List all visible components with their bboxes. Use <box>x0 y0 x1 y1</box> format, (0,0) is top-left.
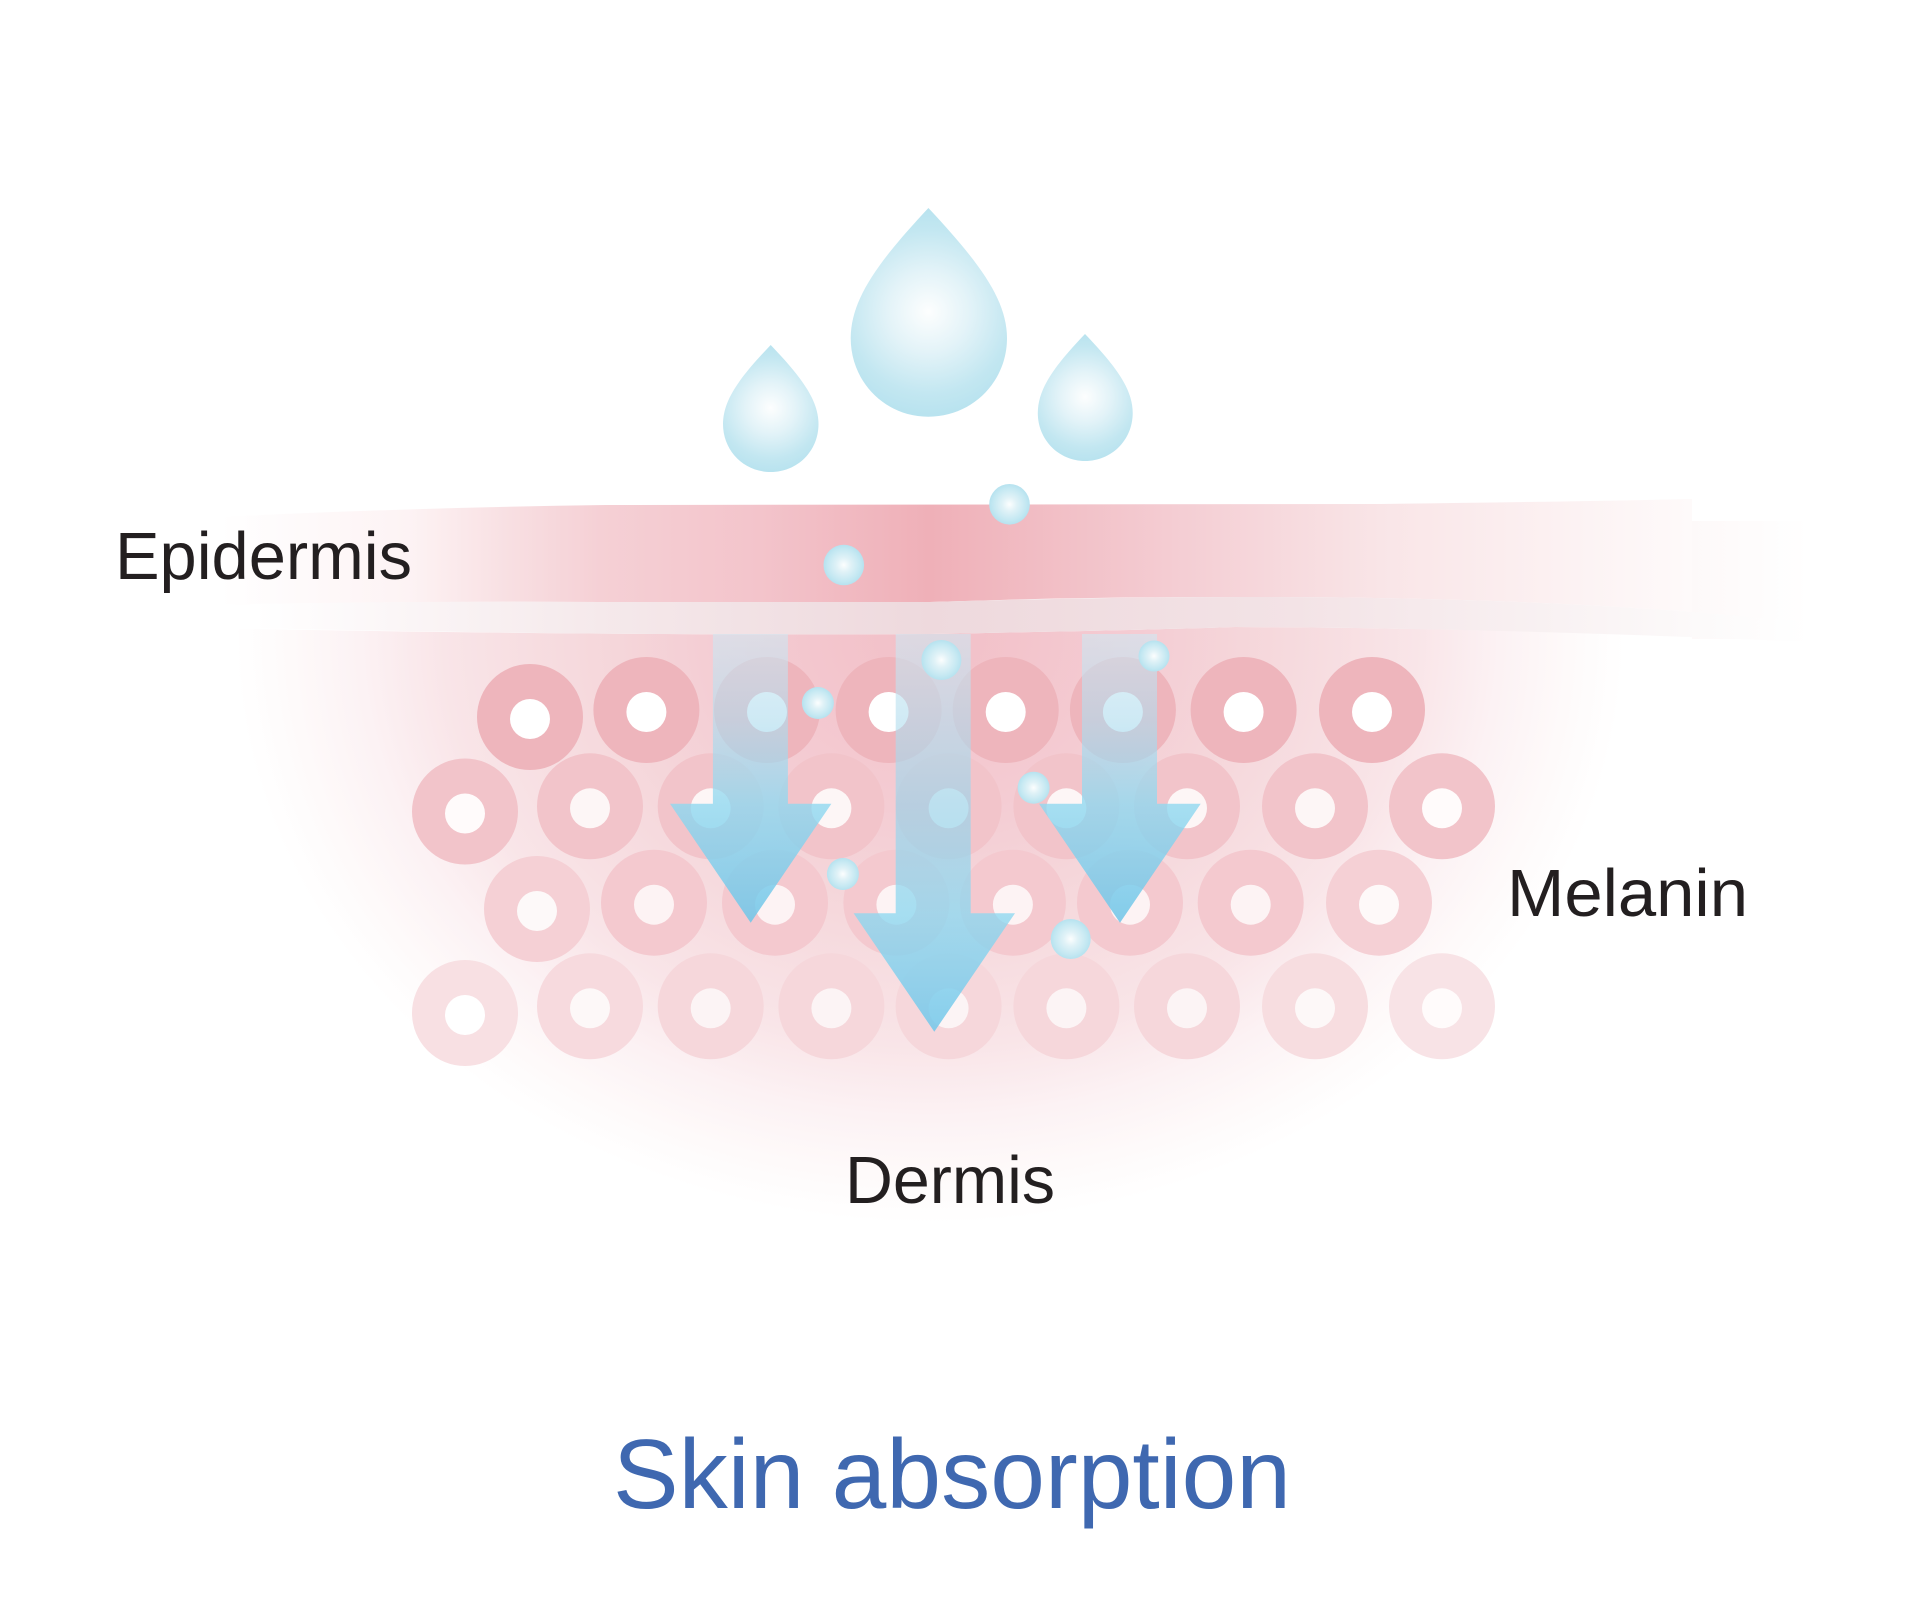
cell row 1 <box>477 657 1425 770</box>
cell row 2 nuclei <box>445 788 1462 834</box>
title: Skin absorption <box>613 1419 1291 1529</box>
melanin cells <box>412 657 1495 1066</box>
cell row 4 nuclei <box>445 988 1462 1035</box>
arrow: centre <box>854 634 1015 1032</box>
lower epidermis band <box>250 597 1810 642</box>
label: Epidermis: Epidermis <box>115 519 412 594</box>
cell row 3 <box>484 850 1432 962</box>
arrow: left <box>670 634 831 923</box>
cell row 1 nuclei <box>510 692 1392 739</box>
dermis layer <box>200 627 1804 1260</box>
epidermis layer <box>220 499 1692 612</box>
label: Melanin: Melanin <box>1507 856 1748 931</box>
icon: large water drop <box>851 208 1007 417</box>
cell row 3 nuclei <box>517 885 1399 931</box>
icon: left water drop <box>723 345 818 472</box>
label: Dermis: Dermis <box>845 1143 1055 1218</box>
absorbed bubbles <box>802 484 1170 959</box>
faint layer end <box>1692 521 1810 639</box>
cell row 4 <box>412 953 1495 1066</box>
arrow: right <box>1039 634 1201 923</box>
icon: right water drop <box>1038 334 1133 461</box>
cell row 2 <box>412 753 1495 864</box>
